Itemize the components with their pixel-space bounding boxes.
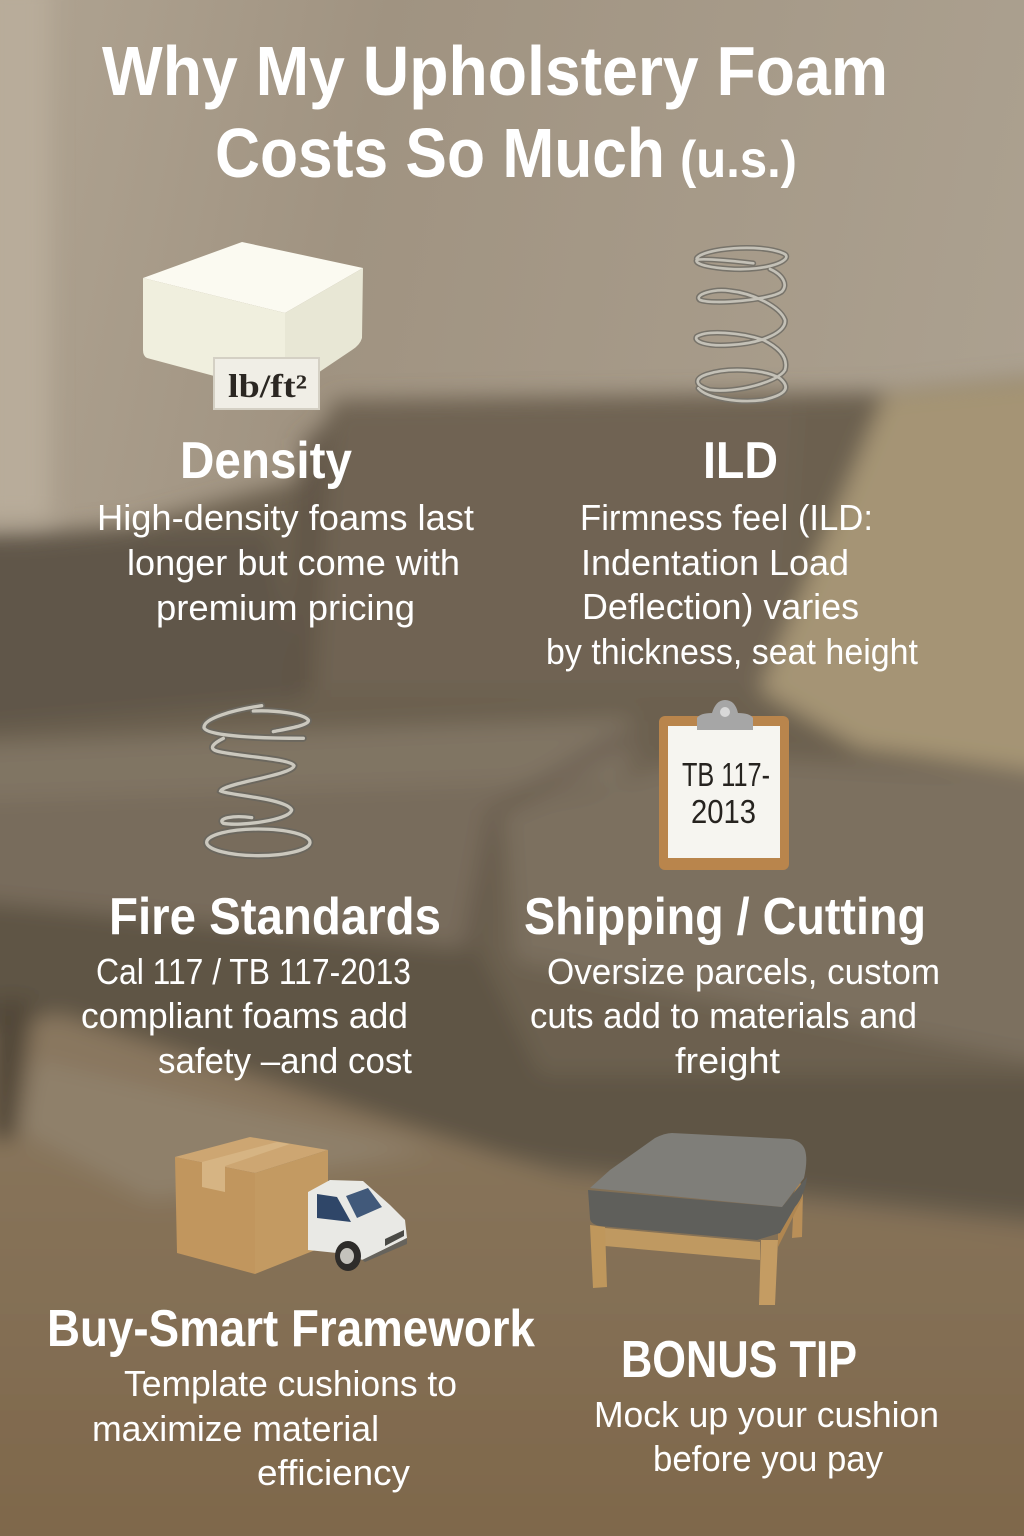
text: ILD description: by thickness, seat height: [546, 631, 918, 672]
icon: ottoman with wooden legs: [588, 1133, 807, 1305]
text: framework description: efficiency: [257, 1452, 410, 1493]
text: shipping description: [530, 951, 940, 1081]
icon: foam block with lb/ft² label: [143, 242, 363, 409]
text: ILD description: Deflection) varies: [582, 586, 859, 627]
title: Why My Upholstery Foam: [102, 32, 888, 110]
text: shipping description: cuts add to materials and: [530, 995, 917, 1036]
heading: Fire Standards: Fire Standards: [109, 888, 441, 946]
heading: Buy-Smart Framework: Buy-Smart Framework: [47, 1300, 535, 1358]
icon: clipboard TB 117-2013: 2013: [691, 793, 756, 830]
icon: clipboard TB 117-2013: TB 117-: [682, 756, 770, 793]
title: Costs So Much: [215, 114, 665, 192]
label: lb/ft²: lb/ft²: [228, 369, 307, 405]
van: [308, 1180, 407, 1271]
text: fire standards description: safety –and cost: [158, 1040, 412, 1081]
text: shipping description: freight: [675, 1040, 780, 1081]
heading: BONUS TIP: BONUS TIP: [621, 1331, 857, 1389]
text: bonus tip description: before you pay: [653, 1438, 883, 1479]
icon: cardboard box and delivery van: [175, 1137, 407, 1274]
text: ILD description: Indentation Load: [581, 542, 849, 583]
title: [102, 32, 888, 192]
text: fire standards description: Cal 117 / TB 117-2013: [96, 951, 411, 992]
heading: Shipping / Cutting: Shipping / Cutting: [524, 888, 926, 946]
icon: coil spring (ILD): [696, 248, 786, 401]
title: (u.s.): [680, 131, 797, 189]
text: density description: [97, 497, 474, 628]
heading: Density: Density: [180, 432, 352, 490]
text: fire standards description: compliant foams add: [81, 995, 408, 1036]
text: fire standards description: [81, 951, 412, 1081]
text: framework description: Template cushions to: [124, 1363, 457, 1404]
back leg and side rail: [778, 1180, 803, 1247]
text: shipping description: Oversize parcels, custom: [547, 951, 940, 992]
text: framework description: [92, 1363, 457, 1493]
text: ILD description: [546, 497, 918, 672]
text: density description: High-density foams last: [97, 497, 474, 538]
text: bonus tip description: Mock up your cushion: [594, 1394, 939, 1435]
text: bonus tip description: [594, 1394, 939, 1479]
icon: clipboard TB 117-2013: [659, 700, 789, 870]
text: density description: longer but come with: [127, 542, 460, 583]
icon: coil spring (fire standards): [204, 706, 310, 856]
text: density description: premium pricing: [156, 587, 415, 628]
text: ILD description: Firmness feel (ILD:: [580, 497, 873, 538]
heading: ILD: ILD: [703, 432, 778, 490]
label: lb/ft²: [214, 358, 319, 409]
text: framework description: maximize material: [92, 1408, 379, 1449]
